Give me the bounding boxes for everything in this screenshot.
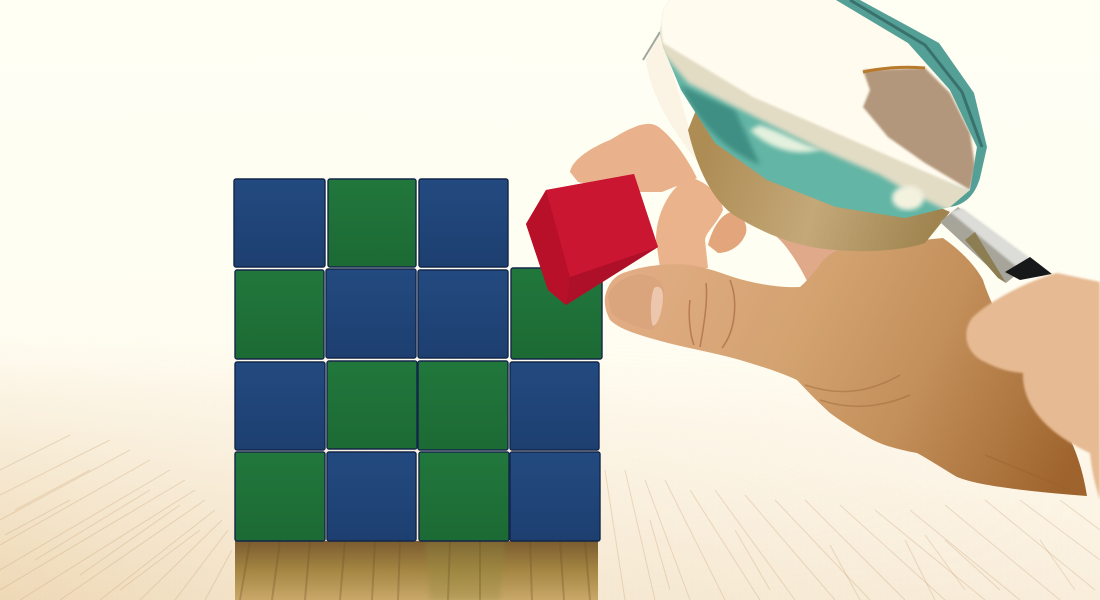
index, middle and ring fingers xyxy=(570,124,843,283)
lens: teal shadow xyxy=(680,85,760,165)
palm creases xyxy=(805,375,1070,490)
wood grain xyxy=(0,435,1100,600)
foreground finger xyxy=(966,273,1100,500)
red cube xyxy=(526,174,658,305)
knuckle wrinkles xyxy=(689,280,735,348)
block stack xyxy=(234,179,602,541)
teal rim xyxy=(836,0,987,207)
main hand and thumb xyxy=(605,238,1087,496)
lens: bright spot xyxy=(892,186,924,210)
magnifying glass xyxy=(643,0,1052,283)
brass side xyxy=(688,100,950,251)
lens: tan patch xyxy=(863,68,975,190)
block reflection xyxy=(235,541,598,600)
white lens side xyxy=(646,30,700,165)
lens: beige band xyxy=(655,25,980,212)
lens: highlight xyxy=(750,125,825,152)
handle xyxy=(940,207,1052,283)
lens: cream upper area xyxy=(655,0,990,200)
thumbnail xyxy=(608,274,664,330)
lens glass xyxy=(660,0,977,218)
table tint xyxy=(0,370,768,600)
